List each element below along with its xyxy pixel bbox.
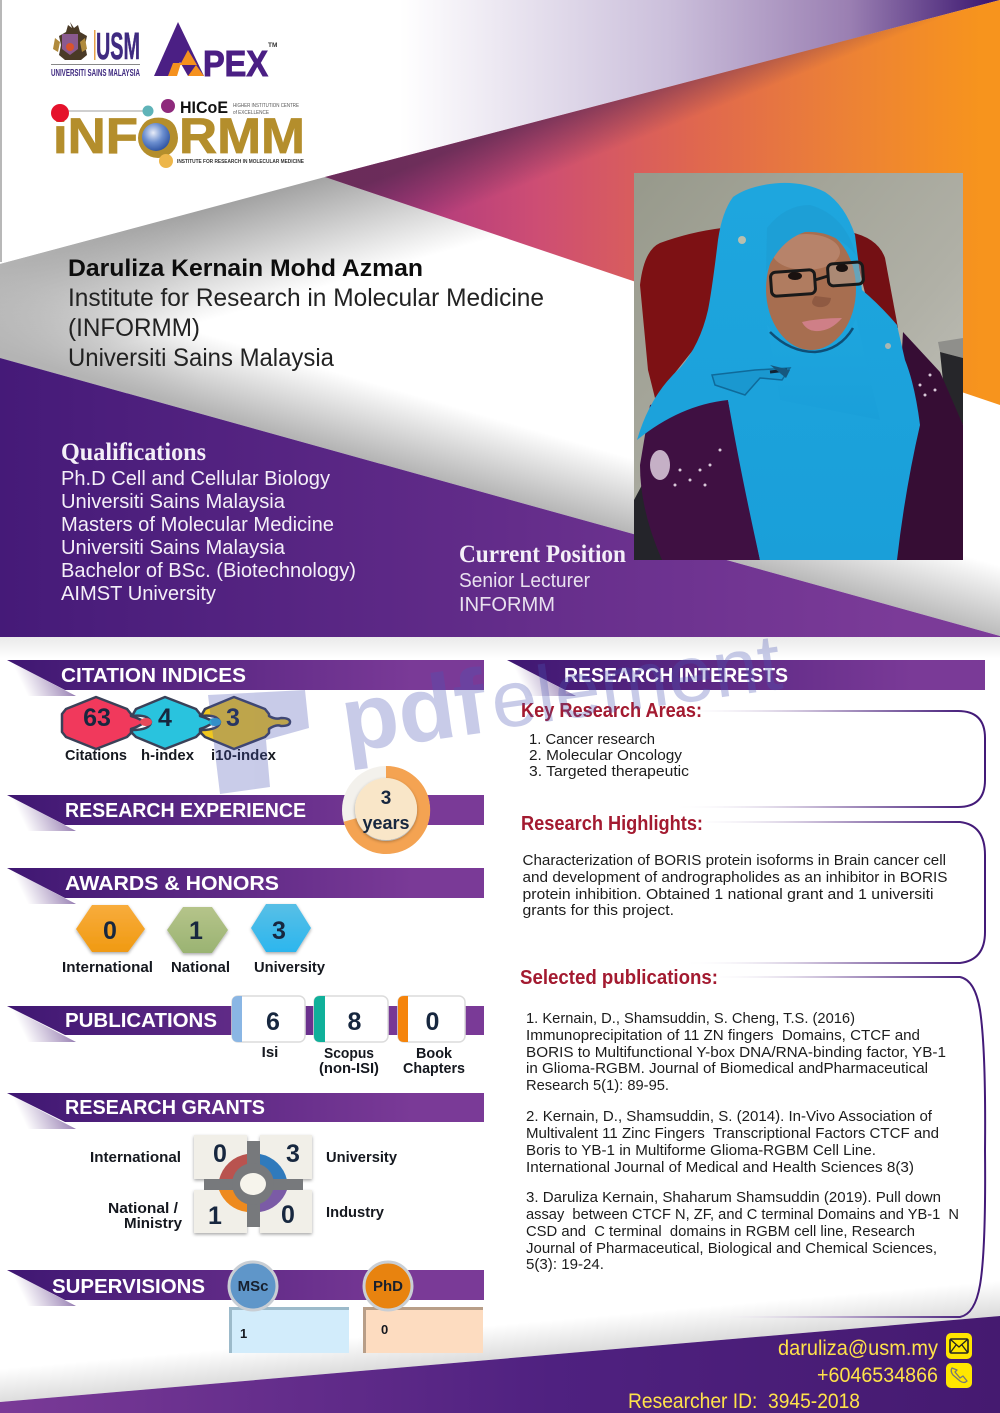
heading: publications bbox=[7, 1006, 484, 1042]
publication 1: BORIS to Multifunctional Y-box DNA/RNA-binding factor, YB-1 bbox=[526, 1044, 946, 1061]
contact details bbox=[628, 1337, 938, 1413]
grants quadrant diagram bbox=[194, 1135, 312, 1233]
name and affiliation: Daruliza Kernain Mohd Azman bbox=[68, 255, 423, 282]
panel: selected publications: Selected publications: bbox=[520, 967, 718, 989]
publication 3: Journal of Pharmaceutical, Biological and Chemical Sciences, bbox=[526, 1240, 937, 1257]
heading: research experience: RESEARCH EXPERIENCE bbox=[65, 799, 306, 822]
hexagon: i10-index bbox=[201, 697, 290, 749]
panel: research highlights bbox=[521, 813, 985, 963]
logo: INFORMM HICoE: of EXCELLENCE bbox=[233, 110, 269, 116]
publication cards bbox=[232, 996, 465, 1077]
logo: APEX: PEX bbox=[203, 43, 268, 84]
publication 3: assay between CTCF N, ZF, and C terminal Domains and YB-1 N bbox=[526, 1206, 959, 1223]
labels: International bbox=[62, 959, 153, 976]
contact details: Researcher ID: 3945-2018 bbox=[628, 1390, 860, 1413]
qualifications: Ph.D Cell and Cellular Biology bbox=[61, 468, 330, 490]
publication 3: CSD and C terminal domains in RGBM cell line, Research bbox=[526, 1223, 915, 1240]
publication 1 bbox=[526, 1010, 946, 1094]
chart: citation hexagons bbox=[62, 697, 290, 764]
grants labels: University bbox=[326, 1149, 398, 1166]
icon: phone bbox=[946, 1363, 972, 1388]
watermark: pdfelement: element bbox=[485, 617, 787, 746]
hexagon: h-index: 4 bbox=[158, 704, 172, 732]
qualifications: Bachelor of BSc. (Biotechnology) bbox=[61, 560, 356, 582]
labels: i10-index bbox=[211, 747, 277, 764]
publication 2: Boris to YB-1 in Multiforme Glioma-RGBM Cell Line. bbox=[526, 1142, 876, 1159]
contact details: daruliza@usm.my bbox=[778, 1337, 938, 1360]
hexagon: h-index bbox=[132, 697, 214, 749]
supervision: MSc: MSc bbox=[238, 1278, 268, 1295]
card: book chapters: Book bbox=[416, 1045, 453, 1062]
grants quadrant diagram: 1 bbox=[208, 1202, 222, 1230]
logo: USM bbox=[51, 22, 140, 79]
current position: Current Position bbox=[459, 541, 626, 568]
card: ISI bbox=[232, 996, 305, 1061]
logo: INFORMM HICoE: HICoE bbox=[180, 98, 228, 117]
labels: National bbox=[171, 959, 230, 976]
hexagon: citations bbox=[62, 697, 145, 749]
hexagon: citations: 63 bbox=[83, 704, 111, 732]
donut: 3 years: years bbox=[362, 813, 410, 833]
heading: awards and honors bbox=[7, 868, 484, 904]
hexagon: international: 0 bbox=[103, 917, 117, 945]
name and affiliation: Universiti Sains Malaysia bbox=[68, 344, 334, 372]
publication 3: 3. Daruliza Kernain, Shaharum Shamsuddin (2019). Pull down bbox=[526, 1189, 941, 1206]
hexagon: i10-index: 3 bbox=[226, 704, 240, 732]
card: Scopus: 8 bbox=[348, 1008, 362, 1036]
publication 1: Research 5(1): 89-95. bbox=[526, 1077, 669, 1094]
panel: key research areas: Key Research Areas: bbox=[521, 700, 702, 722]
heading: awards and honors: AWARDS & HONORS bbox=[65, 872, 279, 895]
heading: research interests: RESEARCH INTERESTS bbox=[564, 664, 788, 687]
heading: supervisions: SUPERVISIONS bbox=[52, 1275, 205, 1298]
qualifications bbox=[61, 439, 356, 605]
logo: USM: USM bbox=[96, 26, 140, 68]
grants labels: Industry bbox=[326, 1204, 385, 1221]
hexagon: university bbox=[251, 904, 311, 952]
grants labels: National / bbox=[108, 1200, 179, 1217]
icon: email bbox=[946, 1333, 972, 1359]
labels: University bbox=[254, 959, 326, 976]
qualifications: Universiti Sains Malaysia bbox=[61, 537, 286, 559]
qualifications: Masters of Molecular Medicine bbox=[61, 514, 334, 536]
card: Scopus: Scopus bbox=[324, 1045, 374, 1062]
supervision: MSc: 1 bbox=[240, 1326, 247, 1341]
panel: research highlights: Research Highlights: bbox=[521, 813, 703, 835]
hexagon: national bbox=[167, 907, 228, 953]
logo: INFORMM HICoE: HIGHER INSTITUTION CENTRE bbox=[233, 103, 299, 109]
card: Scopus: (non-ISI) bbox=[319, 1060, 379, 1077]
publication 3: 5(3): 19-24. bbox=[526, 1256, 604, 1273]
card: book chapters: Chapters bbox=[403, 1060, 465, 1077]
awards hexagons bbox=[62, 904, 326, 976]
publication 3 bbox=[526, 1189, 959, 1273]
current position bbox=[459, 541, 626, 616]
donut: 3 years bbox=[342, 766, 430, 854]
name and affiliation bbox=[68, 255, 544, 372]
panel: selected publications bbox=[520, 967, 985, 1317]
card: ISI: Isi bbox=[262, 1044, 278, 1061]
heading: citation indices bbox=[7, 660, 484, 696]
section fade under header bbox=[0, 637, 1000, 659]
publication 2: International Journal of Medical and Health Sciences 8(3) bbox=[526, 1159, 914, 1176]
current position: Senior Lecturer bbox=[459, 570, 590, 592]
grants quadrant diagram: 0 bbox=[281, 1201, 295, 1229]
hexagon: national: 1 bbox=[189, 917, 203, 945]
panel: research highlights: protein inhibition. Obtained 1 national grant and 1 universiti bbox=[522, 886, 934, 903]
card: Scopus bbox=[314, 996, 388, 1077]
grants quadrant diagram: 0 bbox=[213, 1140, 227, 1168]
publication 2: 2. Kernain, D., Shamsuddin, S. (2014). In-Vivo Association of bbox=[526, 1108, 933, 1125]
grants labels bbox=[90, 1149, 398, 1232]
hexagon: international bbox=[76, 905, 145, 952]
logo: APEX: TM bbox=[268, 42, 277, 49]
heading: research experience bbox=[7, 795, 484, 831]
grants labels: International bbox=[90, 1149, 181, 1166]
heading: research grants: RESEARCH GRANTS bbox=[65, 1096, 265, 1119]
logo: INFORMM HICoE: iNFORMM bbox=[53, 108, 305, 164]
heading: publications: PUBLICATIONS bbox=[65, 1009, 217, 1032]
header background shapes bbox=[0, 0, 1000, 640]
panel: key research areas: 1. Cancer research bbox=[529, 731, 655, 748]
labels: Citations bbox=[65, 747, 127, 764]
watermark: pdfelement bbox=[208, 617, 787, 794]
card: ISI: 6 bbox=[266, 1008, 280, 1036]
heading: citation indices: CITATION INDICES bbox=[61, 664, 246, 687]
publication 2 bbox=[526, 1108, 939, 1176]
publication 1: Immunoprecipitation of 11 ZN fingers Domains, CTCF and bbox=[526, 1027, 920, 1044]
qualifications: Qualifications bbox=[61, 439, 206, 466]
grants quadrant diagram: 3 bbox=[286, 1140, 300, 1168]
qualifications: Universiti Sains Malaysia bbox=[61, 491, 286, 513]
publication 2: Multivalent 11 Zinc Fingers Transcriptional Factors CTCF and bbox=[526, 1125, 939, 1142]
logo: USM: UNIVERSITI SAINS MALAYSIA bbox=[51, 67, 140, 79]
logo: INFORMM HICoE: INSTITUTE FOR RESEARCH IN MOLECULAR MEDICINE bbox=[177, 159, 304, 165]
panel: key research areas: 2. Molecular Oncology bbox=[529, 747, 683, 764]
watermark: pdfelement: pdf bbox=[335, 651, 493, 772]
heading: research interests bbox=[507, 660, 985, 696]
panel: research highlights: grants for this project. bbox=[522, 902, 674, 919]
hexagon: university: 3 bbox=[272, 917, 286, 945]
labels bbox=[62, 959, 326, 976]
grants labels: Ministry bbox=[124, 1215, 183, 1232]
current position: INFORMM bbox=[459, 594, 555, 616]
portrait photo bbox=[634, 173, 963, 560]
heading: research grants bbox=[7, 1093, 484, 1129]
footer background bbox=[0, 1270, 1000, 1413]
card: book chapters bbox=[398, 996, 465, 1077]
name and affiliation: (INFORMM) bbox=[68, 314, 200, 342]
labels: h-index bbox=[141, 747, 195, 764]
publication 1: in Glioma-RGBM. Journal of Biomedical andPharmaceutical bbox=[526, 1060, 928, 1077]
contact details: +6046534866 bbox=[817, 1364, 938, 1387]
supervision: MSc bbox=[229, 1262, 349, 1353]
panel: research highlights: and development of andrographolides as an inhibitor in BORIS bbox=[522, 869, 948, 886]
publication 1: 1. Kernain, D., Shamsuddin, S. Cheng, T.S. (2016) bbox=[526, 1010, 855, 1027]
panel: research highlights: Characterization of BORIS protein isoforms in Brain cancer cell bbox=[522, 852, 946, 869]
qualifications: AIMST University bbox=[61, 583, 216, 605]
panel: key research areas: 3. Targeted therapeutic bbox=[529, 763, 690, 780]
supervision: PhD: 0 bbox=[381, 1322, 388, 1337]
supervision: PhD bbox=[363, 1262, 483, 1353]
labels bbox=[65, 747, 277, 764]
name and affiliation: Institute for Research in Molecular Medicine bbox=[68, 284, 544, 312]
logo: APEX bbox=[154, 22, 277, 84]
supervision: PhD: PhD bbox=[373, 1278, 403, 1295]
panel: key research areas bbox=[521, 700, 985, 807]
heading: supervisions bbox=[7, 1270, 484, 1306]
card: book chapters: 0 bbox=[426, 1008, 439, 1036]
donut: 3 years: 3 bbox=[381, 788, 391, 809]
